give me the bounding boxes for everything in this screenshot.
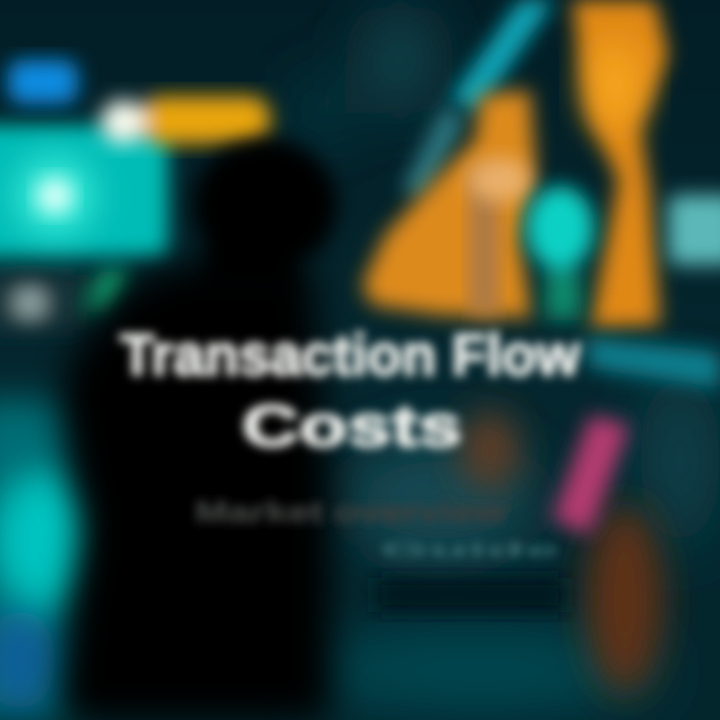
column highlight: [468, 158, 532, 202]
panel: teal glow lower left: [0, 400, 95, 720]
teal horizontal bar right: [585, 338, 720, 388]
center column: [470, 170, 498, 315]
brown glow under title: [460, 410, 520, 490]
subtitle: Guide: [380, 540, 560, 560]
flame highlight: [587, 40, 643, 130]
silhouette head: [193, 139, 337, 290]
heading: Costs: [242, 394, 462, 459]
teal orb center: [526, 186, 594, 320]
icon: yellow and white pill: [101, 96, 270, 144]
dark band below subtitle: [375, 578, 565, 612]
faint diagonal beam: [402, 105, 465, 200]
ambient background glow: [298, 5, 720, 710]
icon: blue indicator: [8, 60, 78, 104]
panel: teal screen on the left: [0, 125, 168, 330]
cyan diagonal beam: [450, 0, 555, 112]
subtitle: [195, 496, 560, 560]
icon: screen glow core: [37, 178, 73, 214]
dark silhouette: [60, 262, 330, 720]
teal element right: [668, 195, 720, 265]
pink bar: [552, 415, 630, 535]
orange flame right: [572, 0, 668, 328]
orange flame left: [362, 90, 535, 318]
heading: Transaction Flow: [120, 323, 581, 388]
brown glow lower right: [587, 505, 663, 695]
icon: bright screen glow: [17, 158, 93, 234]
heading: [120, 323, 581, 459]
subtitle: Market overview: [195, 496, 506, 529]
